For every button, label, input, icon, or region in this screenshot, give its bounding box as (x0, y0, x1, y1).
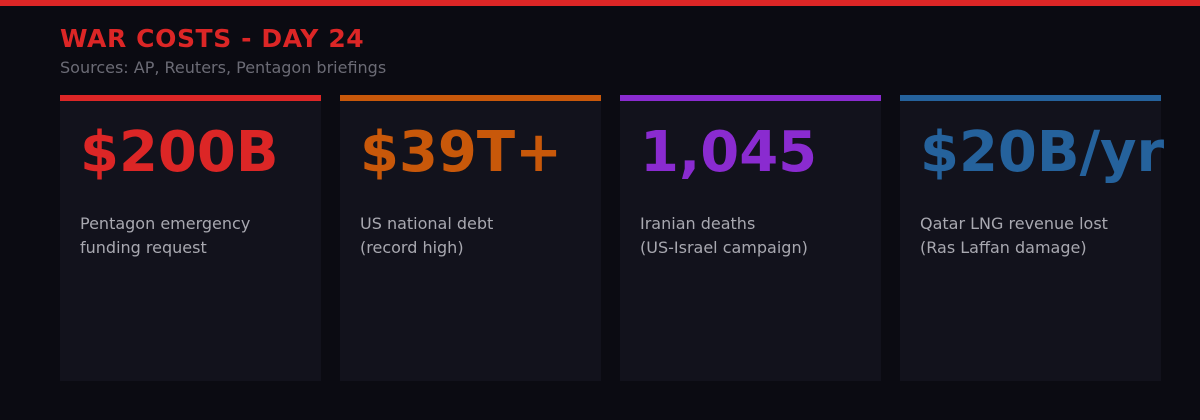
stat label: Pentagon emergency (80, 214, 250, 233)
stat label (640, 214, 808, 257)
stat label: US national debt (360, 214, 493, 233)
stat value: $39T+ (360, 120, 562, 185)
panel: iranian deaths (620, 95, 881, 381)
stat label: funding request (80, 238, 207, 257)
stat label: (US-Israel campaign) (640, 238, 808, 257)
stat value: $200B (80, 120, 279, 185)
stat label: Qatar LNG revenue lost (920, 214, 1108, 233)
panel: pentagon funding (60, 95, 321, 381)
title: WAR COSTS - DAY 24 (60, 24, 364, 53)
stat label (920, 214, 1108, 257)
stat label: (record high) (360, 238, 464, 257)
stat value: 1,045 (640, 120, 817, 185)
stat label (80, 214, 250, 257)
stat label (360, 214, 493, 257)
panel: national debt (340, 95, 601, 381)
stat label: Iranian deaths (640, 214, 755, 233)
stat label: (Ras Laffan damage) (920, 238, 1087, 257)
top accent bar (0, 0, 1200, 6)
stat value: $20B/yr (920, 120, 1164, 185)
panel: qatar LNG (900, 95, 1161, 381)
subtitle: sources: Sources: AP, Reuters, Pentagon briefings (60, 58, 386, 77)
